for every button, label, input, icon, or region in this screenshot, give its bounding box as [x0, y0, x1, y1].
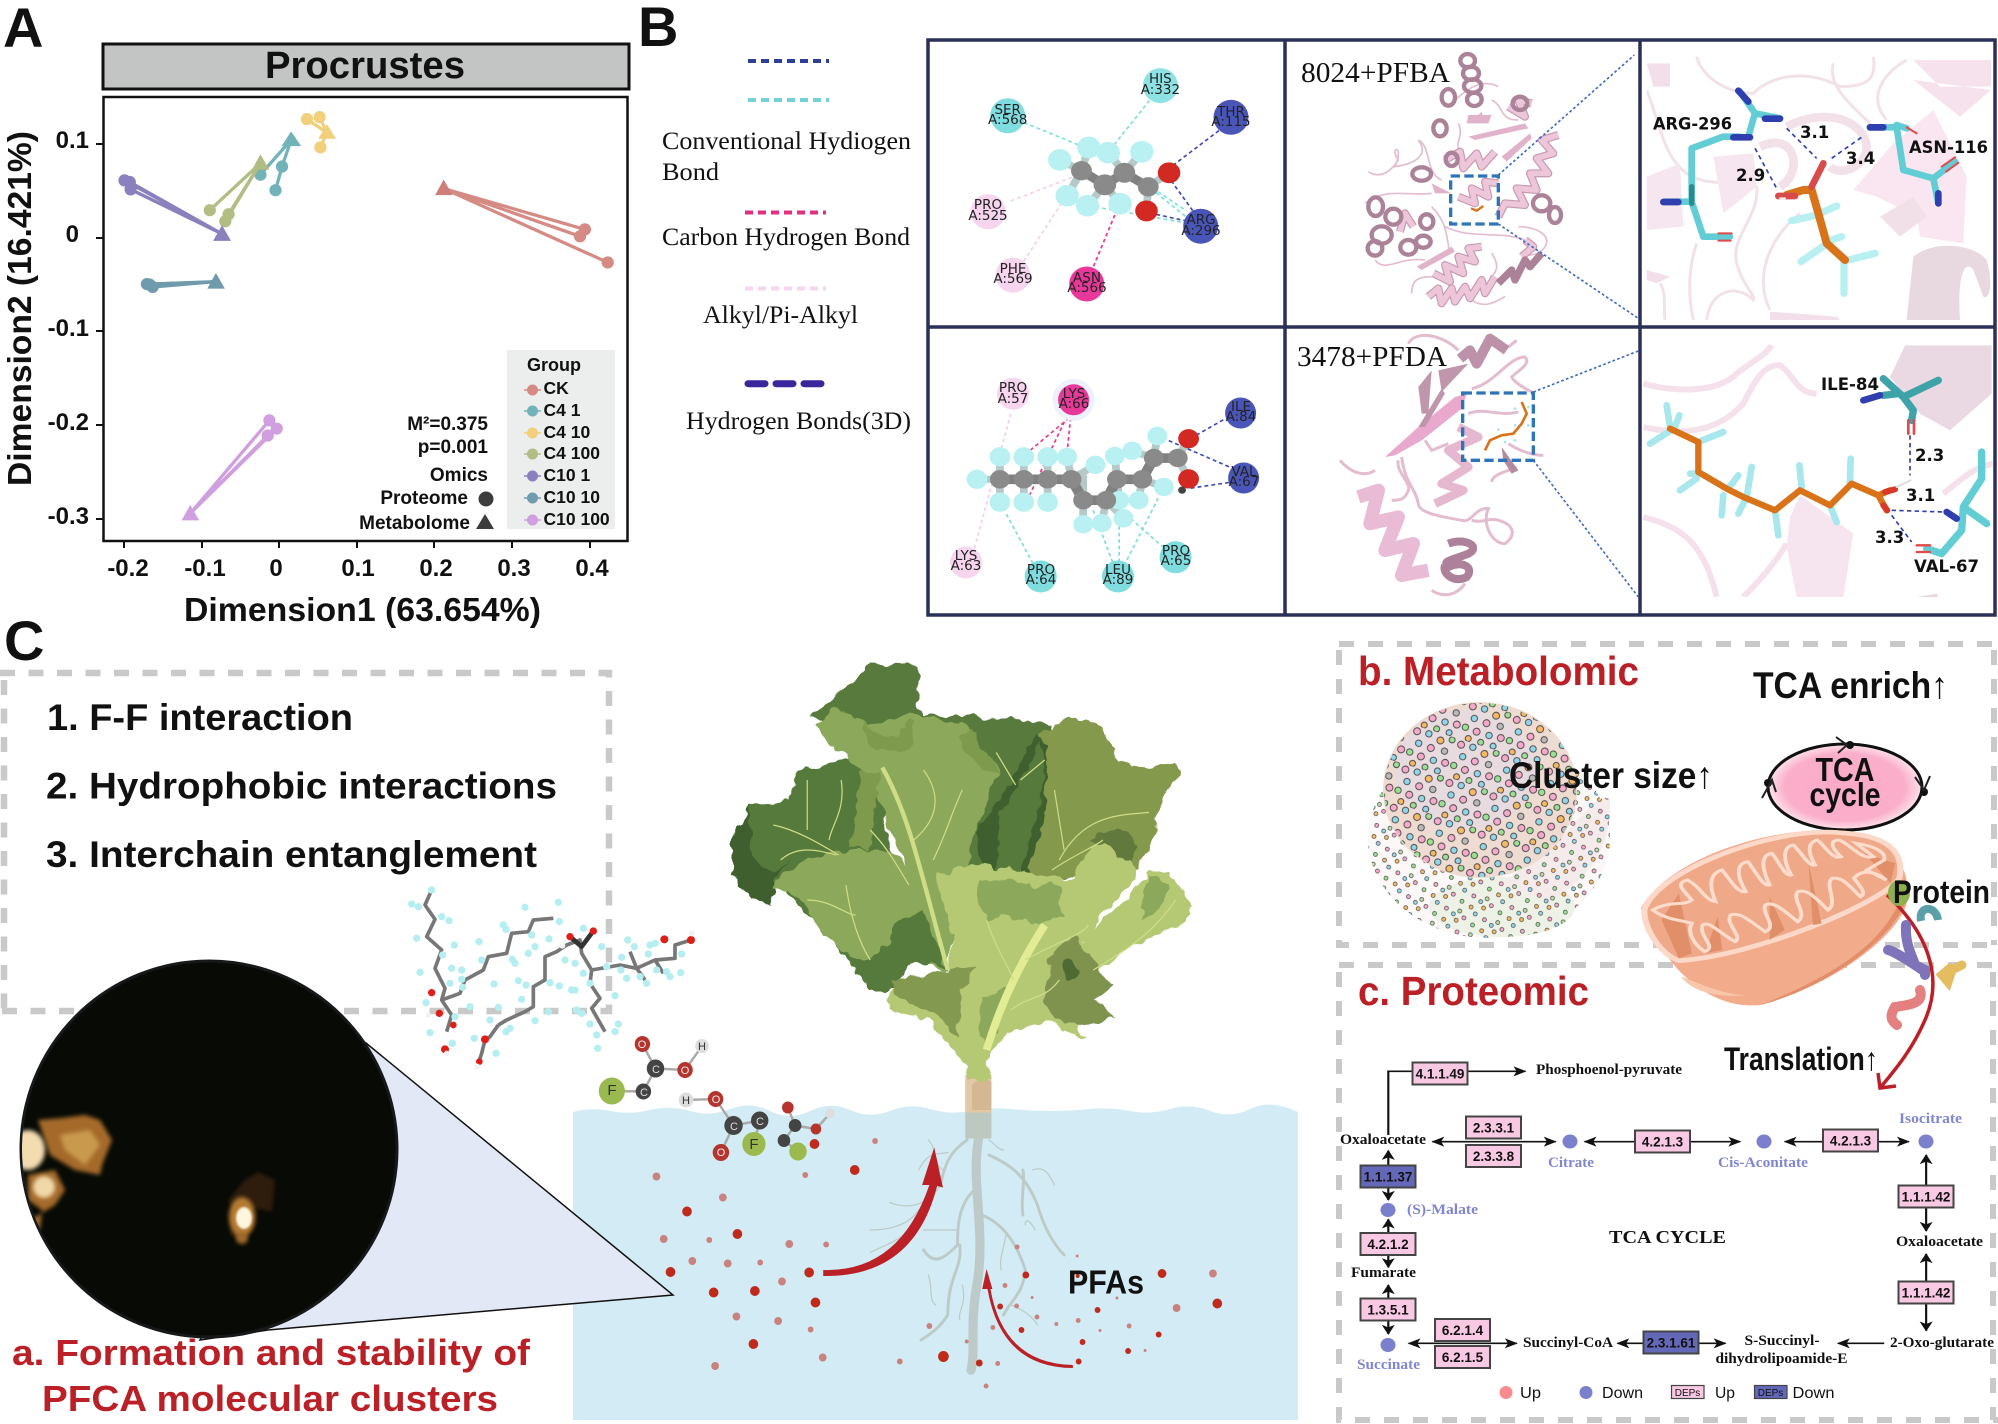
residue and distance labels: [1653, 114, 1988, 185]
data: paired proteome and metabolome points: [118, 111, 614, 520]
2D interaction diagram: 3478 + PFDA: [950, 378, 1259, 592]
label: TCA enrich: TCA enrich↑: [1753, 665, 1948, 706]
carbon chains: [425, 890, 691, 1063]
residue discs: PRO: [1027, 562, 1055, 578]
atom letters: H: [682, 1095, 690, 1107]
plot frame and ticks: [96, 97, 628, 548]
residue and distance labels: 3.4: [1846, 149, 1875, 168]
roots: [870, 1135, 1064, 1370]
atoms: [599, 1036, 835, 1161]
water body: [573, 1105, 1298, 1420]
legend line: alkyl: [745, 286, 826, 290]
TCA cycle ellipse: TCA: [1816, 751, 1874, 788]
y axis tick labels: -0.3: [48, 503, 89, 530]
group C4 10: [301, 111, 336, 153]
label: translation: Translation↑: [1724, 1041, 1878, 1077]
atom letters: O: [717, 1147, 726, 1159]
pathway legend: DEPs: [1675, 1388, 1700, 1399]
residue discs: PRO: [1162, 543, 1190, 559]
metabolite names: Succinyl-CoA: [1523, 1335, 1613, 1351]
AFM image circle: [11, 961, 397, 1337]
x axis tick labels: 0.2: [419, 555, 453, 582]
x axis tick labels: -0.2: [107, 555, 149, 582]
enzyme numbers: 2.3.3.1: [1473, 1120, 1515, 1136]
ILE-84 stick: [1863, 379, 1938, 434]
statistics and omics legend: Omics: [430, 465, 488, 486]
selection box: [1451, 176, 1498, 224]
legend text: carbon hydrogen bond: Carbon Hydrogen Bond: [662, 224, 911, 251]
back dark leaves: [732, 662, 1052, 990]
group legend: C4 10: [544, 422, 590, 442]
protein cartoon: 3478 + PFDA: 3478+PFDA: [1297, 341, 1447, 373]
caption: formation and stability of clusters: PFCA molecular clusters: [42, 1378, 498, 1419]
plot title bar: [103, 44, 629, 89]
group C10 10: [141, 273, 225, 293]
residue and distance labels: VAL-67: [1914, 557, 1979, 576]
residue and distance labels: [1821, 375, 1979, 576]
hydrogen bond dashes: [1892, 435, 1945, 542]
residue discs: ASN: [1073, 270, 1101, 286]
light ribbons: helix fill: [1400, 100, 1558, 303]
atom letters: H: [698, 1041, 706, 1053]
x axis title: Dimension1 (63.654%): [184, 591, 541, 628]
residue discs: VAL: [1231, 464, 1257, 480]
x axis tick labels: -0.1: [184, 555, 226, 582]
thin loops: [1365, 84, 1547, 304]
residue discs: A:65: [1161, 553, 1191, 569]
residue and distance labels: 3.1: [1800, 123, 1829, 142]
residue and distance labels: 3.3: [1875, 528, 1904, 547]
loops: [1340, 335, 1543, 595]
residue discs: A:568: [988, 112, 1027, 128]
ligand: [1471, 206, 1483, 211]
x axis tick labels: 0.4: [575, 555, 609, 582]
atom letters: F: [607, 1082, 617, 1099]
TCA cycle ellipse: [1762, 737, 1930, 830]
residue discs: THR: [1216, 104, 1245, 120]
protein cartoon: 8024 + PFBA: 8024+PFBA: [1301, 57, 1450, 89]
residue discs: A:66: [1059, 396, 1089, 412]
residue discs: ARG: [1186, 212, 1216, 228]
residue discs: A:63: [951, 558, 981, 574]
atom letters: C: [756, 1116, 764, 1128]
PFAs dots: [653, 1138, 1222, 1388]
pathway legend: Down: [1602, 1385, 1643, 1402]
dark lower folds: [856, 910, 948, 990]
enzyme numbers: 6.2.1.5: [1442, 1350, 1484, 1365]
PFBA ball-and-stick molecule: [1048, 137, 1180, 221]
residue discs: A:525: [968, 208, 1008, 224]
metabolite names: S-Succinyl-: [1744, 1333, 1820, 1349]
legend line: carbon hydrogen bond: [745, 210, 826, 214]
residue and distance labels: ASN-116: [1909, 138, 1988, 157]
leaves: [732, 662, 1193, 1080]
residue discs: [968, 68, 1251, 301]
protein: yellow: [1942, 965, 1962, 982]
residue and distance labels: 2.9: [1736, 166, 1765, 185]
atom letters: O: [681, 1065, 690, 1077]
enzyme boxes: [1360, 1062, 1954, 1368]
3D binding site: PFBA: [1647, 57, 1992, 320]
x axis tick labels: 0: [269, 555, 283, 582]
interaction dashed lines: [1011, 100, 1219, 267]
PFCA cluster molecule: [408, 886, 695, 1070]
lettuce plant with roots: [732, 662, 1193, 1370]
interaction dashed lines: [974, 414, 1232, 562]
front light leaf: [887, 842, 1137, 1080]
dark lower helix: [1498, 253, 1542, 283]
group legend: Group: [527, 355, 581, 375]
pale protein ribbons: [1647, 57, 1992, 320]
pathway legend: Up: [1715, 1385, 1735, 1402]
group legend: [507, 350, 615, 529]
group CK: [435, 180, 614, 269]
residue and distance labels: 2.3: [1915, 446, 1944, 465]
residue discs: A:89: [1103, 572, 1133, 588]
metabolite names: Citrate: [1548, 1155, 1594, 1171]
enzyme numbers: 1.1.1.42: [1902, 1190, 1950, 1204]
y axis title: Dimension2 (16.421%): [1, 131, 38, 486]
statistics and omics legend: [359, 414, 494, 534]
plot title bar: Procrustes: [265, 45, 465, 87]
zoom cone from circle to water point: [200, 1043, 673, 1340]
outer membrane: [1641, 830, 1908, 1005]
residue and distance labels: ILE-84: [1821, 375, 1879, 394]
legend line: conventional hydrogen bond cyan: [748, 98, 829, 102]
enzyme numbers: [1364, 1066, 1950, 1365]
pathway legend: DEPs: [1758, 1388, 1783, 1399]
residue discs: LEU: [1105, 562, 1131, 578]
PFDA ball-and-stick molecule: [967, 427, 1199, 534]
mid green main leaf: [814, 708, 999, 972]
residue discs: LYS: [1063, 386, 1085, 402]
right olive leaf: [1025, 718, 1180, 885]
3D binding site: PFDA: [1643, 345, 1993, 597]
right small leaf: [1081, 872, 1193, 972]
residue discs: SER: [994, 102, 1021, 118]
residue discs: A:296: [1181, 223, 1221, 239]
stem: [965, 1075, 991, 1138]
atom letters: C: [730, 1121, 738, 1133]
PFA molecules in air and water: [599, 1036, 835, 1161]
olive lower leaves: [892, 965, 977, 1035]
zoom guide lines: [1498, 55, 1638, 318]
caption: formation and stability of clusters: [12, 1332, 531, 1419]
bonds: [612, 1044, 830, 1152]
TCA cycle ellipse: cycle: [1810, 776, 1880, 813]
x axis tick labels: 0.1: [341, 555, 375, 582]
red translation arrow: [1878, 895, 1933, 1088]
panel label: C: C: [4, 609, 44, 672]
y axis tick labels: -0.2: [48, 409, 89, 436]
group legend: C10 100: [544, 509, 610, 529]
protein cartoon: 3478 + PFDA: [1297, 335, 1638, 597]
inner chamber: [1644, 832, 1900, 961]
2D interaction diagram: 8024 + PFBA: [968, 68, 1251, 301]
residue discs: PHE: [1000, 261, 1026, 277]
panel B: docking frame grid: [928, 40, 1995, 615]
statistics and omics legend: Metabolome: [359, 513, 470, 534]
lower left leaf: [771, 850, 924, 960]
group legend: CK: [544, 378, 569, 398]
beta strands: [1385, 394, 1467, 457]
statistics and omics legend: p=0.001: [418, 437, 488, 458]
y axis tick labels: 0.1: [56, 127, 89, 154]
fluorine atoms: [408, 886, 685, 1057]
highlight: [1681, 977, 1746, 996]
faded particles: [653, 1138, 1217, 1388]
atom letters: C: [652, 1064, 660, 1076]
residue discs: A:569: [993, 271, 1033, 287]
caption: formation and stability of clusters: a. Formation and stability of: [12, 1332, 531, 1373]
enzyme numbers: 1.1.1.42: [1902, 1286, 1950, 1300]
legend line: conventional hydrogen bond dark: [748, 59, 829, 63]
light ribbons: helix outline: [1400, 100, 1558, 303]
pathway legend: Down: [1792, 1385, 1834, 1402]
residue discs: A:115: [1211, 114, 1251, 130]
pathway legend: Up: [1520, 1385, 1541, 1402]
cristae folds: [1653, 840, 1886, 952]
heading: proteomic: c. Proteomic: [1358, 968, 1589, 1014]
pale protein ribbons: [1643, 345, 1993, 597]
protein: purple: [1888, 925, 1925, 975]
PFDA ligand: [1485, 402, 1530, 450]
VAL-67 stick: [1917, 452, 1987, 554]
top helix: [1460, 339, 1507, 364]
lower shading: [1761, 893, 1908, 1005]
residue discs: [950, 378, 1259, 592]
pathway legend: [1500, 1385, 1834, 1402]
ARG-296 stick: [1663, 91, 1883, 241]
x axis tick labels: [107, 555, 609, 582]
legend text: alkyl: Alkyl/Pi-Alkyl: [703, 302, 858, 329]
metabolite names: (S)-Malate: [1407, 1202, 1478, 1218]
atom letters: C: [640, 1087, 648, 1099]
residue discs: A:67: [1229, 474, 1259, 490]
large uptake arrow: [823, 1148, 943, 1276]
heading: metabolomic: b. Metabolomic: [1358, 648, 1639, 694]
dark lower wedges: [1662, 853, 1895, 958]
legend text: conventional hydrogen bond: Conventional Hydiogen: [662, 128, 912, 155]
TCA pathway diagram: [1340, 1062, 1994, 1402]
metabolite names: Cis-Aconitate: [1718, 1155, 1808, 1171]
residue discs: ILE: [1231, 399, 1251, 415]
metabolite names: Oxaloacetate: [1896, 1234, 1983, 1250]
dashed callout box: cluster interactions: [0, 673, 609, 1011]
atom letters: [607, 1039, 764, 1159]
residue discs: A:57: [998, 391, 1028, 407]
list of interactions: 1. F-F interaction: [47, 697, 353, 738]
metabolite names: Oxaloacetate: [1340, 1132, 1426, 1148]
residue discs: PRO: [999, 380, 1027, 396]
metabolite names: TCA CYCLE: [1609, 1227, 1726, 1247]
protein cartoon: 8024 + PFBA: [1301, 54, 1638, 318]
oxygen atoms: [428, 927, 695, 1065]
PFBA stick ligand: [1778, 163, 1875, 293]
atom letters: O: [712, 1094, 721, 1106]
residue discs: A:84: [1226, 409, 1256, 425]
panel B legend: interaction types: [662, 61, 912, 435]
group C10 1: [118, 174, 231, 241]
atom letters: O: [638, 1039, 647, 1051]
residue and distance labels: 3.1: [1906, 486, 1935, 505]
group C4 100: [204, 154, 269, 227]
statistics and omics legend: M²=0.375: [407, 414, 488, 435]
statistics and omics legend: Proteome: [380, 488, 468, 509]
zoom guide lines: [1533, 351, 1638, 597]
metabolite names: 2-Oxo-glutarate: [1890, 1335, 1994, 1351]
group legend: C10 1: [544, 465, 590, 485]
residue discs: A:64: [1026, 572, 1056, 588]
label: PFAs: PFAs: [1068, 1264, 1144, 1300]
residue discs: A:566: [1067, 280, 1107, 296]
residue discs: LYS: [955, 548, 977, 564]
protein: red: [1891, 990, 1921, 1025]
fold shadows: [846, 722, 999, 850]
enzyme numbers: 2.3.1.61: [1647, 1336, 1696, 1350]
metabolite names: Succinate: [1357, 1357, 1420, 1373]
PFDA stick ligand: [1650, 405, 1911, 535]
metabolite dots: [1380, 1134, 1934, 1352]
y axis tick labels: [48, 127, 89, 530]
legend line: hydrogen bonds 3D: [748, 380, 822, 387]
label: cluster size: Cluster size↑: [1509, 755, 1713, 796]
small uptake arrow: [982, 1269, 1073, 1368]
atom letters: F: [749, 1136, 759, 1153]
metabolite names: [1340, 1062, 1994, 1373]
hydrogen bond dashes: [1755, 128, 1863, 188]
beta strands: [1417, 112, 1532, 270]
list of interactions: 2. Hydrophobic interactions: [46, 766, 557, 806]
metabolite names: Fumarate: [1351, 1265, 1416, 1281]
enzyme numbers: 4.2.1.2: [1367, 1237, 1409, 1252]
group legend: C10 10: [544, 487, 600, 507]
ASN-116 stick: [1870, 125, 1958, 203]
metabolite names: Isocitrate: [1899, 1111, 1962, 1127]
group legend: C4 100: [544, 443, 600, 463]
mitochondrion: [1641, 830, 1908, 1005]
dashed box: proteomic: [1339, 965, 1998, 1420]
residue discs: A:332: [1141, 82, 1180, 98]
dark helices: [1368, 54, 1561, 256]
protein: teal: [1921, 909, 1938, 921]
enzyme numbers: 2.3.3.8: [1473, 1149, 1515, 1164]
selection box: [1463, 393, 1533, 460]
panel A: Procrustes scatter plot: [1, 44, 629, 628]
protein: green: [1888, 880, 1910, 906]
pathway arrows: [1388, 1071, 1926, 1343]
enzyme numbers: 4.2.1.3: [1642, 1134, 1684, 1150]
y axis tick labels: 0: [66, 221, 79, 248]
left helix: [1358, 490, 1428, 575]
metabolite names: dihydrolipoamide-E: [1716, 1351, 1848, 1367]
enzyme numbers: 4.1.1.49: [1416, 1066, 1464, 1082]
group C4 1: [254, 131, 301, 196]
legend text: conventional hydrogen bond: [662, 128, 912, 186]
leaf veins: [773, 752, 1176, 1050]
middle helix: [1435, 427, 1478, 504]
enzyme numbers: 1.3.5.1: [1367, 1302, 1409, 1318]
dashed box: metabolomic: [1339, 644, 1998, 945]
enzyme numbers: 1.1.1.37: [1364, 1170, 1412, 1184]
list of interactions: [46, 697, 557, 875]
hydrogen atoms: [426, 930, 695, 1070]
legend text: hydrogen bonds 3D: Hydrogen Bonds(3D): [686, 408, 911, 435]
group legend: C4 1: [544, 400, 581, 420]
group C10 100: [182, 414, 283, 520]
enzyme numbers: 4.2.1.3: [1830, 1134, 1872, 1148]
legend text: conventional hydrogen bond: Bond: [662, 159, 720, 186]
list of interactions: 3. Interchain entanglement: [46, 834, 537, 875]
translation arrow and proteins: [1878, 880, 1962, 1088]
y axis tick labels: -0.1: [48, 315, 89, 342]
metabolite network: [1368, 702, 1610, 938]
residue discs: PRO: [974, 197, 1002, 213]
x axis tick labels: 0.3: [497, 555, 531, 582]
solid particles: [666, 1139, 1222, 1366]
residue discs: HIS: [1149, 71, 1172, 87]
residue and distance labels: ARG-296: [1653, 114, 1732, 134]
central flap: [979, 880, 1062, 925]
enzyme numbers: 6.2.1.4: [1442, 1323, 1484, 1338]
metabolite names: Phosphoenol-pyruvate: [1536, 1062, 1682, 1078]
dark centre folds: [977, 735, 1047, 885]
dark helix: [1444, 541, 1473, 579]
